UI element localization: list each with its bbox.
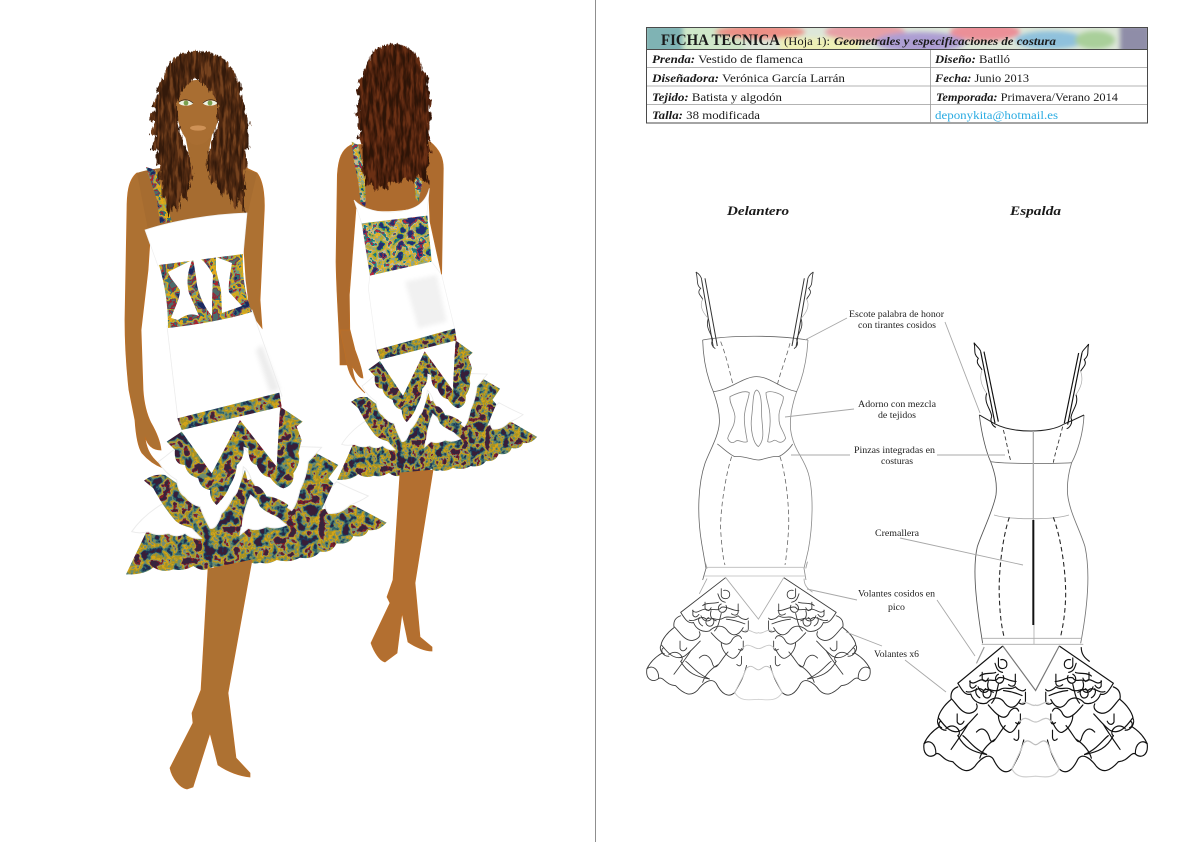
callout: volantes cosidos: Volantes cosidos en — [858, 590, 935, 600]
callout: pinzas: costuras — [881, 457, 913, 467]
callout: pinzas: Pinzas integradas en — [854, 446, 935, 456]
callout: volantes cosidos — [807, 589, 975, 656]
front hair — [149, 51, 250, 218]
skirt shadow — [256, 345, 280, 392]
callout: volantes cosidos: pico — [888, 603, 905, 613]
table cells: Diseño: Batlló — [934, 54, 1010, 66]
front corset fabric — [159, 254, 252, 328]
front bodice — [145, 213, 247, 266]
table title: (Hoja 1): — [784, 36, 830, 48]
back skirt ruffles — [337, 329, 537, 480]
table cells — [651, 54, 1118, 122]
table title: FICHA TECNICA — [661, 32, 780, 49]
back skin — [336, 142, 443, 365]
head — [176, 80, 220, 145]
front ruffles — [647, 562, 870, 700]
table cells: Temporada: Primavera/Verano 2014 — [936, 92, 1118, 104]
technical drawing: back — [924, 343, 1147, 777]
right arm — [235, 165, 264, 328]
callout: volantes x6 — [846, 632, 946, 692]
corset cutouts — [168, 257, 242, 320]
callout: adorno: de tejidos — [878, 411, 916, 421]
eyes — [179, 100, 217, 106]
callout: adorno: Adorno con mezcla — [858, 400, 937, 410]
table title — [661, 32, 1056, 49]
table cells: deponykita@hotmail.es — [935, 110, 1059, 122]
front skirt body — [167, 310, 282, 420]
callout: escote: Escote palabra de honor — [849, 310, 945, 320]
back hair — [354, 44, 433, 192]
figure: front view model — [125, 51, 387, 789]
back straps — [352, 142, 423, 207]
callout: pinzas — [791, 446, 1005, 467]
torso and neck — [137, 125, 257, 240]
front strap fabric — [146, 167, 172, 223]
figure: back view model — [336, 44, 537, 662]
left arm and hand — [125, 173, 170, 468]
lips — [190, 125, 206, 131]
front skirt ruffles — [126, 393, 387, 574]
heading: Espalda: Espalda — [1009, 203, 1062, 218]
callout: cremallera: Cremallera — [875, 529, 920, 539]
back hand — [340, 330, 365, 393]
front bodice and skirt outline — [696, 272, 813, 580]
heading: Delantero: Delantero — [726, 203, 790, 218]
spec sheet table — [645, 23, 1150, 123]
table header background — [647, 28, 1147, 49]
technical drawing: front — [647, 272, 870, 700]
back legs — [371, 470, 433, 662]
callout: cremallera — [875, 529, 1023, 565]
callout: escote — [805, 310, 980, 413]
callout: volantes x6: Volantes x6 — [874, 650, 919, 660]
table cells: Prenda: Vestido de flamenca — [652, 54, 803, 66]
table cells: Tejido: Batista y algodón — [652, 92, 782, 104]
front legs — [170, 560, 252, 789]
page divider — [595, 0, 596, 842]
table cells: Diseñadora: Verónica García Larrán — [651, 73, 845, 85]
callout: adorno — [785, 400, 937, 421]
back dress white — [354, 188, 455, 350]
table cells: Fecha: Junio 2013 — [934, 73, 1029, 85]
back bodice and skirt outline — [974, 343, 1089, 644]
callout: escote: con tirantes cosidos — [858, 321, 936, 331]
table grid — [646, 28, 1148, 123]
table title: Geometrales y especificaciones de costura — [834, 36, 1056, 48]
back ruffles — [924, 646, 1147, 777]
table cells: Talla: 38 modificada — [652, 110, 760, 122]
